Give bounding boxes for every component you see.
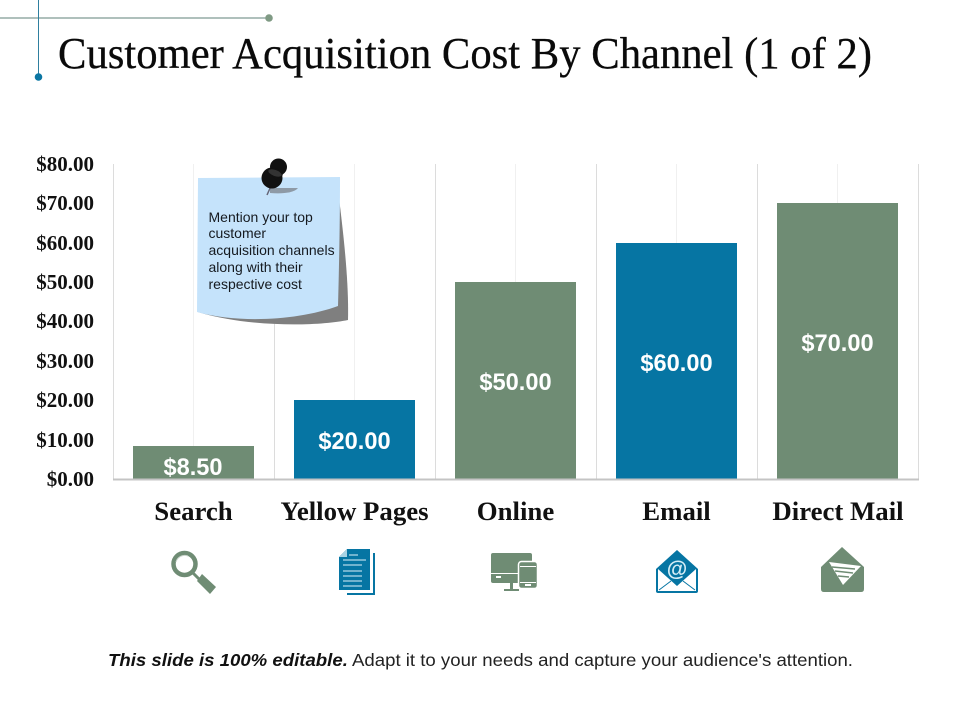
category labels: Yellow Pages	[280, 496, 429, 526]
category labels: Email	[642, 496, 711, 526]
icon: magnifier	[174, 553, 216, 594]
note text: customer	[208, 225, 266, 241]
category labels	[154, 496, 904, 526]
y axis labels: $20.00	[36, 388, 94, 412]
bar values: $70.00	[801, 331, 874, 357]
bar values: $50.00	[479, 370, 552, 396]
category labels: Direct Mail	[772, 496, 904, 526]
y axis labels: $40.00	[36, 309, 94, 333]
y axis labels: $70.00	[36, 191, 94, 215]
bar chart	[36, 152, 919, 491]
note text: respective cost	[208, 276, 302, 292]
note text: Mention your top	[208, 209, 313, 225]
y axis labels: $50.00	[36, 270, 94, 294]
bars	[133, 203, 898, 480]
icon: documents	[339, 549, 375, 595]
icon: email: @	[667, 558, 687, 581]
note text: acquisition channels	[208, 242, 335, 258]
y axis labels: $0.00	[47, 467, 94, 491]
y axis labels: $80.00	[36, 152, 94, 176]
icon: push pin	[262, 158, 298, 195]
category labels: Search	[154, 496, 233, 526]
sticky note	[197, 158, 348, 324]
y axis labels	[36, 152, 94, 491]
footer text: This slide is 100% editable. Adapt it to your needs and capture your audience's attention.	[108, 650, 853, 670]
y axis labels: $30.00	[36, 349, 94, 373]
icon: open envelope	[821, 547, 864, 592]
icon: email	[656, 550, 698, 593]
note text	[208, 209, 335, 292]
y axis labels: $60.00	[36, 231, 94, 255]
title: Customer Acquisition Cost By Channel (1 of 2)	[58, 29, 872, 78]
bar values: $20.00	[318, 429, 391, 455]
category labels: Online	[477, 496, 554, 526]
icon: devices	[491, 553, 538, 591]
corner decoration	[0, 0, 273, 81]
note text: along with their	[208, 259, 303, 275]
bar values: $60.00	[640, 351, 713, 377]
bar values: $8.50	[163, 455, 223, 481]
y axis labels: $10.00	[36, 428, 94, 452]
bar values	[163, 331, 874, 481]
